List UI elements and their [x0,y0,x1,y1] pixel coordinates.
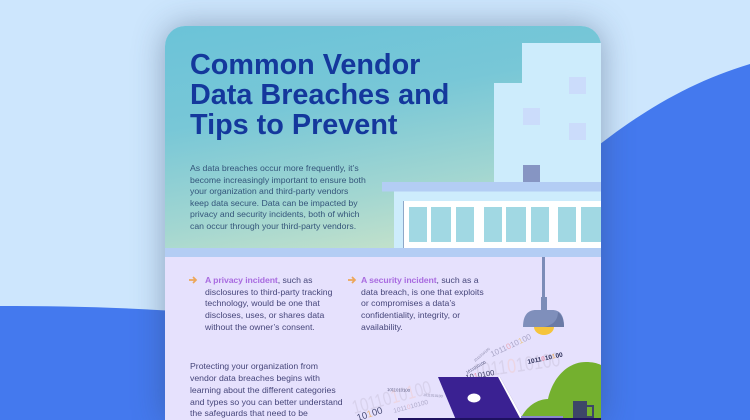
security incident text: confidentiality, integrity, or [361,310,460,320]
protecting paragraph: and types so you can better understand [190,397,343,407]
text: Tips to Prevent [190,109,398,141]
privacy incident text: discloses, uses, or shares data [205,310,324,320]
icon: arrow privacy [189,276,198,284]
text: Common Vendor [190,49,420,81]
binary code stream: 1011010100 [393,399,429,415]
security incident text: data breach, is one that exploits [361,287,484,297]
privacy incident text: A privacy incident, such as [205,275,312,285]
security incident text: A security incident, such as a [361,275,479,285]
binary code stream: 1011010100 [473,347,491,363]
protecting paragraph: the safeguards that need to be [190,408,308,418]
protecting paragraph [190,361,343,418]
protecting paragraph: Protecting your organization from [190,361,318,371]
security incident text: or compromises a data’s [361,298,455,308]
privacy incident text: disclosures to third-party tracking [205,287,332,297]
lamp icon [523,257,564,335]
text: Data Breaches and [190,79,449,111]
intro text: As data breaches occur more frequently, it’s [190,163,359,173]
binary code stream: 1011010100 [387,387,411,393]
intro text: keep data secure. Data can be impacted by [190,198,358,208]
hero panel [165,26,601,248]
card [165,26,601,420]
privacy incident text [205,275,332,332]
title [190,49,449,141]
protecting paragraph: vendor data breaches begins with [190,373,320,383]
protecting paragraph: learning about the different categories [190,385,336,395]
intro text: become increasingly important to ensure both [190,175,366,185]
intro text: privacy and security incidents, both of which [190,209,360,219]
binary code stream: 1011010100 [489,332,533,359]
intro text: can occur through your third-party vendors. [190,221,356,231]
intro text: your organization and third-party vendors [190,186,348,196]
intro text [190,163,366,231]
security incident text [361,275,484,332]
icon: arrow security [348,276,356,284]
privacy incident text: technology, would be one that [205,298,320,308]
privacy incident text: without the owner’s consent. [205,322,315,332]
binary code stream: 1011010100 [472,348,562,382]
binary code stream: 1011010100 [465,359,487,375]
security incident text: availability. [361,322,403,332]
binary code stream: 1011010100 [350,377,434,418]
binary code stream: 1010100 [465,368,495,382]
binary code stream: 1011010100 [423,393,443,398]
binary code stream: 1011010100 [527,352,564,366]
